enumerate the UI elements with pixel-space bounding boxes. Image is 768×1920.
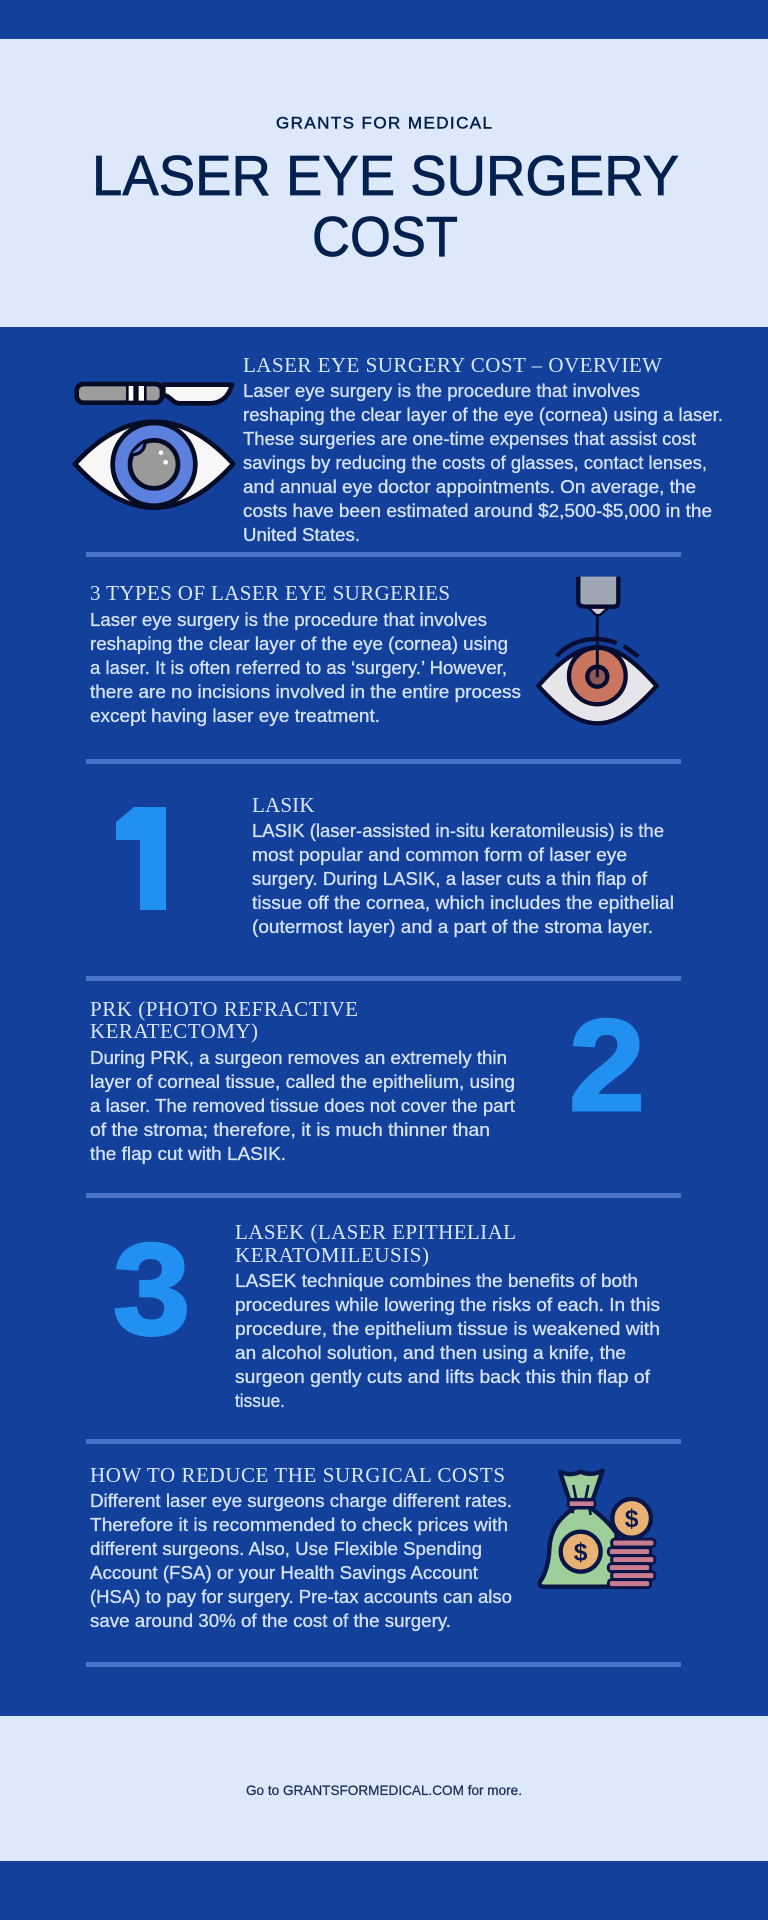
heading bbox=[90, 997, 358, 1043]
text block bbox=[90, 1491, 512, 1631]
panel: reduce costs bbox=[90, 1463, 655, 1631]
text block: costs have been estimated around $2,500-$5,000 in the bbox=[243, 501, 712, 521]
heading: LASEK (LASER EPITHELIAL bbox=[235, 1220, 516, 1244]
panel: header bbox=[0, 39, 768, 327]
text block: except having laser eye treatment. bbox=[90, 706, 380, 726]
title bbox=[92, 144, 679, 269]
text block bbox=[252, 821, 674, 937]
icon: money bag and coins: $ bbox=[625, 1506, 639, 1533]
text block: an alcohol solution, and then using a knife, the bbox=[235, 1343, 626, 1363]
text block: different surgeons. Also, Use Flexible Spending bbox=[90, 1539, 482, 1559]
text block: tissue. bbox=[235, 1391, 285, 1411]
number 2: 2 bbox=[569, 993, 645, 1138]
text block: procedure, the epithelium tissue is weakened with bbox=[235, 1319, 660, 1339]
text block: tissue off the cornea, which includes the epithelial bbox=[252, 893, 674, 913]
text block: and annual eye doctor appointments. On average, the bbox=[243, 477, 696, 497]
heading: HOW TO REDUCE THE SURGICAL COSTS bbox=[90, 1463, 505, 1487]
icon: laser on eye bbox=[538, 577, 657, 723]
text block: surgeon gently cuts and lifts back this thin flap of bbox=[235, 1367, 651, 1387]
text block: United States. bbox=[243, 525, 360, 545]
text block: These surgeries are one-time expenses that assist cost bbox=[243, 429, 696, 449]
text block: save around 30% of the cost of the surgery. bbox=[90, 1611, 451, 1631]
text block: savings by reducing the costs of glasses, contact lenses, bbox=[243, 453, 707, 473]
text block: surgery. During LASIK, a laser cuts a thin flap of bbox=[252, 869, 648, 889]
text block: Different laser eye surgeons charge different rates. bbox=[90, 1491, 512, 1511]
text block bbox=[235, 1271, 660, 1411]
heading bbox=[235, 1220, 516, 1267]
subtitle: GRANTS FOR MEDICAL bbox=[276, 114, 492, 132]
heading: 3 TYPES OF LASER EYE SURGERIES bbox=[90, 581, 450, 605]
title: LASER EYE SURGERY bbox=[92, 144, 679, 208]
text block: (outermost layer) and a part of the stroma layer. bbox=[252, 917, 653, 937]
text block: Laser eye surgery is the procedure that involves bbox=[243, 381, 640, 401]
text block: Account (FSA) or your Health Savings Account bbox=[90, 1563, 478, 1583]
text block: most popular and common form of laser eye bbox=[252, 845, 627, 865]
text block: the flap cut with LASIK. bbox=[90, 1144, 286, 1164]
heading: KERATECTOMY) bbox=[90, 1019, 258, 1043]
text block: procedures while lowering the risks of each. In this bbox=[235, 1295, 660, 1315]
heading: KERATOMILEUSIS) bbox=[235, 1243, 429, 1267]
panel: overview bbox=[75, 353, 723, 545]
text block bbox=[90, 1048, 515, 1164]
heading: LASER EYE SURGERY COST – OVERVIEW bbox=[243, 353, 662, 377]
text block: Laser eye surgery is the procedure that involves bbox=[90, 610, 487, 630]
text block: Therefore it is recommended to check prices with bbox=[90, 1515, 508, 1535]
footer text: Go to GRANTSFORMEDICAL.COM for more. bbox=[246, 1782, 522, 1798]
text block: During PRK, a surgeon removes an extremely thin bbox=[90, 1048, 507, 1068]
text block bbox=[243, 381, 723, 545]
text block bbox=[90, 610, 521, 726]
heading: PRK (PHOTO REFRACTIVE bbox=[90, 997, 358, 1021]
panel: PRK bbox=[90, 993, 645, 1164]
text block: layer of corneal tissue, called the epithelium, using bbox=[90, 1072, 515, 1092]
icon: money bag and coins bbox=[540, 1471, 655, 1588]
text block: a laser. The removed tissue does not cover the part bbox=[90, 1096, 515, 1116]
title: COST bbox=[312, 205, 458, 269]
panel: LASIK bbox=[90, 791, 674, 938]
heading: LASIK bbox=[252, 793, 314, 817]
text block: a laser. It is often referred to as ‘surgery.’ However, bbox=[90, 658, 507, 678]
text block: reshaping the clear layer of the eye (cornea) using bbox=[90, 634, 508, 654]
icon: money bag and coins: $ bbox=[574, 1539, 588, 1566]
panel: footer bbox=[0, 1716, 768, 1861]
text block: (HSA) to pay for surgery. Pre-tax accounts can also bbox=[90, 1587, 512, 1607]
text block: of the stroma; therefore, it is much thinner than bbox=[90, 1120, 490, 1140]
text block: LASIK (laser-assisted in-situ keratomileusis) is the bbox=[252, 821, 664, 841]
number 1: 1 bbox=[108, 791, 181, 938]
panel: 3 types bbox=[90, 577, 657, 726]
panel: LASEK bbox=[113, 1216, 660, 1411]
text block: LASEK technique combines the benefits of both bbox=[235, 1271, 638, 1291]
text block: there are no incisions involved in the entire process bbox=[90, 682, 521, 702]
text block: reshaping the clear layer of the eye (cornea) using a laser. bbox=[243, 405, 723, 425]
icon: scalpel and eye bbox=[75, 384, 233, 508]
number 1 bbox=[90, 791, 200, 938]
number 3: 3 bbox=[113, 1216, 190, 1362]
